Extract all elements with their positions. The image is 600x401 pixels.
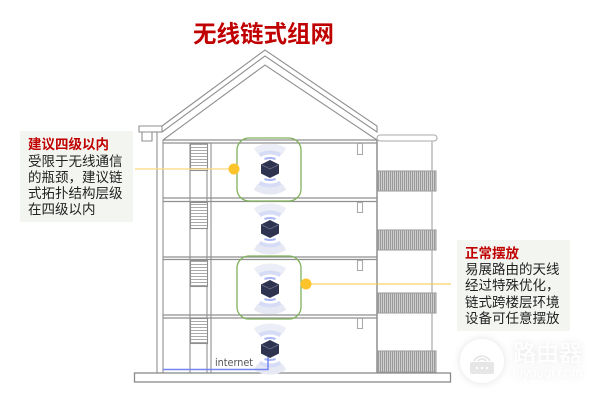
- callout: right: [457, 240, 570, 331]
- callout: left: 的瓶颈，建议链: [28, 170, 123, 185]
- watermark text: 路由器: [513, 340, 582, 366]
- icon: router logo: [460, 339, 504, 383]
- router 4: [256, 327, 284, 371]
- staircases: [190, 144, 208, 344]
- floors and walls: [157, 132, 377, 373]
- callout: right: 易展路由的天线: [465, 262, 560, 277]
- callout: left: 在四级以内: [28, 202, 96, 217]
- callout: left: 受限于无线通信: [28, 154, 122, 169]
- connector: left callout: [135, 164, 240, 174]
- watermark text: luyouqi.com: [513, 366, 582, 380]
- green highlight box: lower: [237, 256, 301, 319]
- callout: left: [20, 131, 133, 222]
- router 2: [256, 207, 284, 251]
- router 3: [256, 267, 284, 311]
- connector: right callout: [300, 278, 451, 290]
- title: 无线链式组网: [193, 21, 334, 47]
- green highlight box: upper: [237, 138, 301, 201]
- small windows: [358, 144, 362, 328]
- callout: right: 经过特殊优化，: [465, 278, 560, 293]
- callout: left: 建议四级以内: [28, 136, 109, 152]
- callout: right: 正常摆放: [465, 245, 519, 261]
- right tower: [377, 135, 437, 372]
- internet label: internet: [215, 357, 253, 369]
- roof: [139, 50, 377, 141]
- router 1: [256, 147, 284, 191]
- callout: left: 式拓扑结构层级: [28, 186, 123, 201]
- ground base: [134, 373, 450, 382]
- building: [134, 50, 450, 382]
- callout: right: 设备可任意摆放: [465, 310, 560, 326]
- internet cable: [163, 357, 268, 370]
- callout: right: 链式跨楼层环境: [465, 295, 560, 310]
- watermark: [460, 339, 582, 383]
- watermark text: [513, 340, 582, 380]
